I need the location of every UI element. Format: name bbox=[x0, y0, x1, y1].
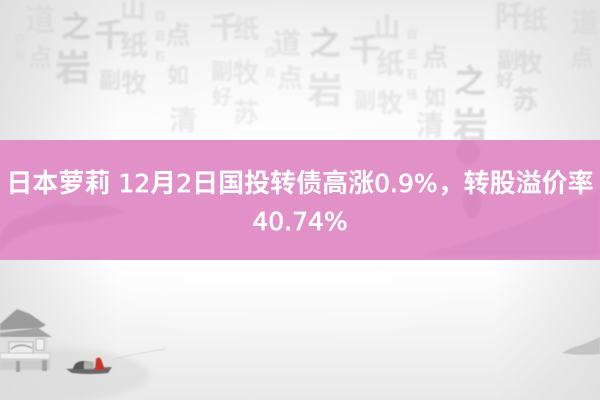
calligraphy backdrop: 副 bbox=[211, 54, 233, 86]
calligraphy backdrop: 点 bbox=[277, 58, 303, 95]
calligraphy backdrop: 之 bbox=[309, 18, 341, 64]
calligraphy backdrop: 牧 bbox=[233, 53, 259, 90]
calligraphy backdrop: 云 bbox=[154, 28, 166, 44]
bottom mist wash bbox=[0, 347, 150, 400]
calligraphy backdrop: 点 bbox=[422, 37, 448, 74]
calligraphy backdrop: 径 bbox=[406, 86, 418, 102]
calligraphy backdrop: 牧 bbox=[377, 83, 403, 120]
calligraphy backdrop: 道 bbox=[571, 1, 599, 41]
calligraphy backdrop: 如 bbox=[424, 80, 446, 112]
pink title band bbox=[0, 140, 600, 260]
calligraphy backdrop: 点 bbox=[165, 15, 191, 52]
title: 40.74% bbox=[252, 207, 348, 236]
pavilion bbox=[0, 309, 52, 372]
calligraphy backdrop: 千 bbox=[210, 3, 240, 47]
calligraphy backdrop: 好 bbox=[496, 67, 514, 93]
calligraphy backdrop: 牧 bbox=[517, 43, 543, 80]
calligraphy backdrop: 云 bbox=[264, 64, 276, 80]
calligraphy backdrop: 牧 bbox=[121, 63, 147, 100]
boat with red sail bbox=[66, 349, 166, 374]
calligraphy backdrop: 副 bbox=[497, 43, 519, 75]
calligraphy backdrop: 岩 bbox=[55, 39, 91, 91]
calligraphy backdrop: 清 bbox=[416, 104, 444, 144]
calligraphy backdrop: 石 bbox=[406, 66, 418, 82]
calligraphy backdrop: 点 bbox=[570, 38, 594, 73]
calligraphy backdrop: 白 bbox=[406, 26, 418, 42]
title: 日本萝莉 12月2日国投转债高涨0.9%，转股溢价率 bbox=[6, 163, 594, 200]
calligraphy backdrop: 千 bbox=[349, 25, 381, 71]
calligraphy backdrop: 千 bbox=[94, 10, 126, 56]
calligraphy backdrop: 副 bbox=[99, 63, 121, 95]
calligraphy backdrop: 纸 bbox=[522, 0, 548, 37]
faint wash texture in the band bbox=[0, 140, 600, 260]
calligraphy backdrop: 岩 bbox=[307, 62, 343, 114]
calligraphy backdrop: 苏 bbox=[233, 93, 259, 130]
calligraphy backdrop: 岩 bbox=[452, 97, 488, 149]
distant island bbox=[562, 337, 600, 355]
calligraphy backdrop: 白 bbox=[14, 30, 26, 46]
calligraphy backdrop: 云 bbox=[406, 46, 418, 62]
calligraphy backdrop bbox=[14, 0, 599, 149]
calligraphy backdrop: 山 bbox=[374, 8, 400, 45]
calligraphy backdrop: 好 bbox=[212, 81, 232, 110]
title bbox=[6, 163, 594, 236]
calligraphy backdrop: 纸 bbox=[120, 24, 148, 64]
calligraphy backdrop: 之 bbox=[61, 2, 91, 46]
calligraphy backdrop: 苏 bbox=[512, 80, 538, 117]
calligraphy backdrop: 白 bbox=[154, 8, 166, 24]
calligraphy backdrop: 之 bbox=[454, 56, 486, 102]
calligraphy backdrop: 副 bbox=[354, 83, 376, 115]
calligraphy backdrop: 石 bbox=[154, 48, 166, 64]
calligraphy backdrop: 白 bbox=[264, 44, 276, 60]
calligraphy backdrop: 如 bbox=[167, 58, 189, 90]
calligraphy backdrop: 道 bbox=[273, 22, 301, 62]
calligraphy backdrop: 清 bbox=[169, 99, 197, 139]
calligraphy backdrop: 纸 bbox=[233, 9, 259, 46]
calligraphy backdrop: 点 bbox=[28, 38, 52, 73]
calligraphy backdrop: 纸 bbox=[376, 42, 404, 82]
calligraphy backdrop: 云 bbox=[14, 46, 26, 62]
